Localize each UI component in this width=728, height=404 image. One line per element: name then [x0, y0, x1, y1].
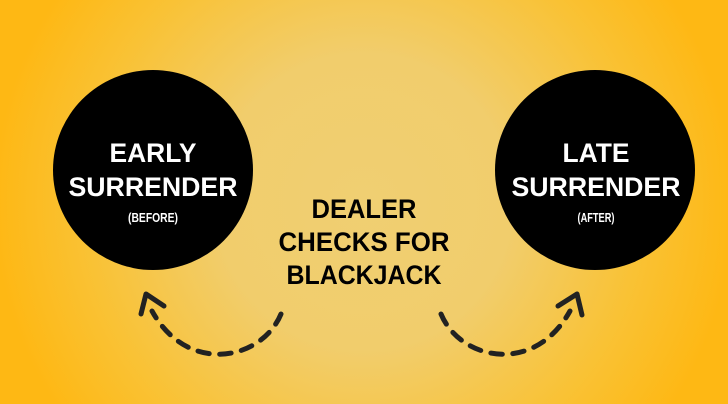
center text: dealer checks for blackjack: BLACKJACK — [286, 260, 442, 290]
late surrender circle — [495, 70, 695, 270]
early surrender note: (BEFORE) — [128, 211, 178, 225]
late surrender note: (AFTER) — [578, 211, 614, 225]
late surrender heading: LATE — [562, 138, 630, 168]
early surrender heading: EARLY — [110, 138, 196, 168]
panel: early surrender — [53, 70, 253, 270]
arrow: to late surrender — [441, 294, 582, 354]
panel: late surrender — [495, 70, 695, 270]
arrow: to early surrender — [141, 294, 281, 354]
early surrender heading: SURRENDER — [68, 172, 238, 202]
late surrender heading: SURRENDER — [512, 172, 680, 202]
center text: dealer checks for blackjack: CHECKS FOR — [278, 227, 450, 257]
late surrender heading — [512, 138, 680, 202]
early surrender heading — [68, 138, 238, 202]
center text: dealer checks for blackjack: DEALER — [312, 194, 416, 224]
center text: dealer checks for blackjack — [278, 194, 450, 290]
early surrender circle — [53, 70, 253, 270]
